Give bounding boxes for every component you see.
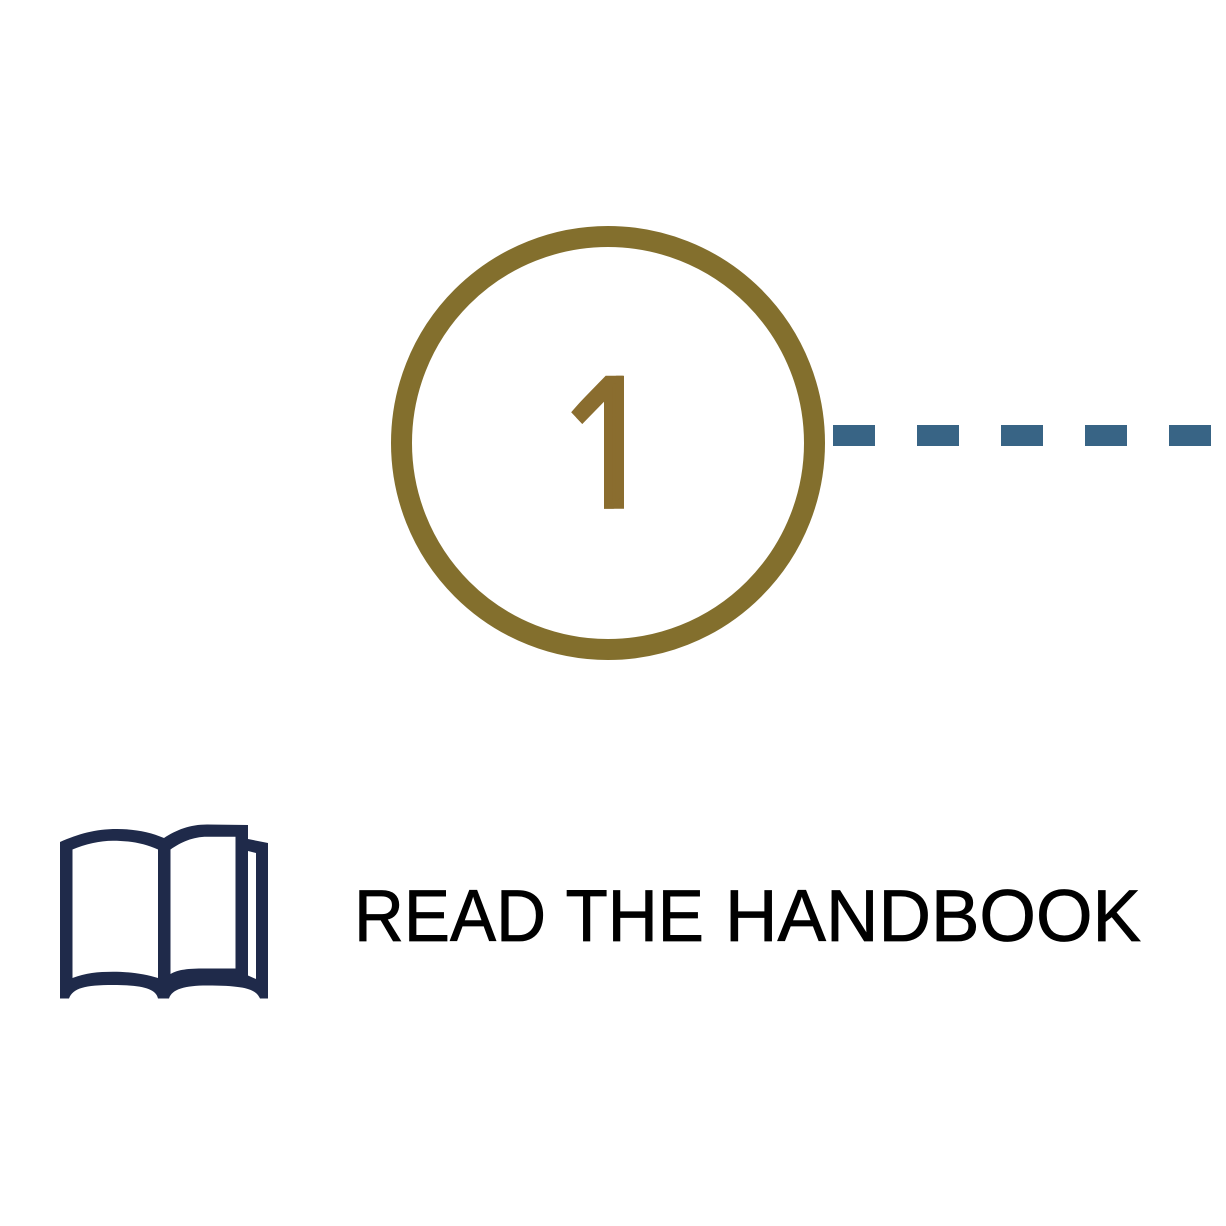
step label: THE — [566, 876, 704, 957]
dashed connector arrow — [833, 425, 1211, 446]
icon: open book — [60, 824, 268, 998]
badge ring — [402, 236, 814, 650]
step label: READ — [354, 876, 546, 957]
step number: 1 — [558, 313, 664, 575]
step number badge — [402, 236, 814, 650]
step label: HANDBOOK — [725, 876, 1141, 957]
step label — [354, 876, 1141, 957]
